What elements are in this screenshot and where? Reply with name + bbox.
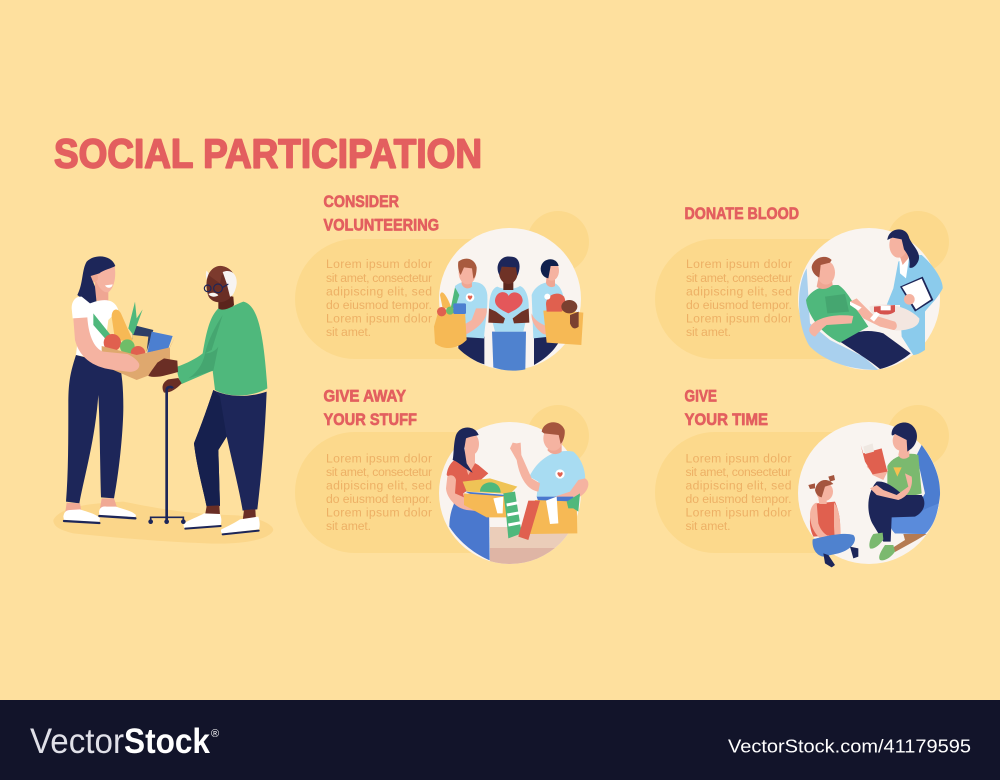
body text: Lorem ipsum dolor <box>686 506 792 520</box>
panel: donate blood <box>655 205 949 370</box>
body text: Lorem ipsum dolor <box>326 451 432 465</box>
body text: adipiscing elit, sed <box>686 478 792 492</box>
volunteer with heart <box>488 256 529 371</box>
heading <box>324 193 439 234</box>
body text <box>686 451 792 533</box>
clothes box <box>463 478 522 538</box>
body text: Lorem ipsum dolor <box>326 312 432 326</box>
man with box <box>510 422 588 540</box>
pill background <box>655 432 895 553</box>
panel: give your time <box>655 388 949 567</box>
heading: YOUR STUFF <box>324 411 417 429</box>
main illustration: woman handing grocery box to elderly man <box>53 256 273 544</box>
illustration: sharing clothes <box>446 422 588 560</box>
heading: CONSIDER <box>324 193 399 211</box>
armrest and blood bag <box>869 304 919 331</box>
donor <box>806 257 911 369</box>
illustration: blood donation <box>799 229 943 370</box>
elderly man <box>148 266 267 534</box>
child <box>808 475 858 567</box>
body text: sit amet, consectetur <box>686 465 792 479</box>
body text: Lorem ipsum dolor <box>686 312 792 326</box>
illustration circle <box>439 228 581 370</box>
title: SOCIAL PARTICIPATION <box>54 130 482 176</box>
footer logo: Vector <box>30 722 124 761</box>
grocery box <box>93 302 175 380</box>
panel: consider volunteering <box>295 193 589 371</box>
body text: do eiusmod tempor. <box>326 298 432 312</box>
illustration: three volunteers <box>434 256 583 371</box>
illustration circle <box>798 422 940 564</box>
footer logo <box>30 722 219 761</box>
body text <box>326 451 432 533</box>
body text: sit amet. <box>326 325 371 339</box>
body text: sit amet. <box>326 519 371 533</box>
heading: YOUR TIME <box>684 411 768 429</box>
pill background <box>655 239 895 359</box>
body text <box>686 257 792 339</box>
body text: sit amet, consectetur <box>686 271 792 285</box>
accent circle <box>887 211 949 273</box>
body text <box>326 257 432 339</box>
volunteer with box <box>532 259 583 365</box>
body text: Lorem ipsum dolor <box>686 257 792 271</box>
footer bar <box>0 700 1000 780</box>
body text: sit amet. <box>686 519 730 533</box>
body text: sit amet. <box>686 325 731 339</box>
body text: do eiusmod tempor. <box>686 492 792 506</box>
woman's arm <box>73 317 139 372</box>
illustration circle <box>439 422 581 564</box>
body text: Lorem ipsum dolor <box>686 451 792 465</box>
heading: DONATE BLOOD <box>684 205 799 223</box>
armchair <box>889 445 940 552</box>
walking cane <box>148 387 186 524</box>
footer logo: ® <box>211 728 219 740</box>
illustration: woman reading to child <box>808 423 940 567</box>
illustration circle <box>798 228 940 370</box>
accent circle <box>527 211 589 273</box>
body text: Lorem ipsum dolor <box>326 506 432 520</box>
heading <box>324 388 417 429</box>
illustration floor front <box>490 548 555 564</box>
accent circle <box>887 405 949 467</box>
body text: adipiscing elit, sed <box>326 478 432 492</box>
body text: do eiusmod tempor. <box>686 298 792 312</box>
body text: sit amet, consectetur <box>326 271 432 285</box>
footer image id: VectorStock.com/41179595 <box>728 736 971 756</box>
body text: Lorem ipsum dolor <box>326 257 432 271</box>
volunteer with bag <box>434 259 487 364</box>
pill background <box>295 239 535 359</box>
body text: adipiscing elit, sed <box>326 284 432 298</box>
footer logo: Stock <box>124 722 210 761</box>
body text: adipiscing elit, sed <box>686 284 792 298</box>
doctor <box>887 229 943 355</box>
ground shadow <box>53 502 273 544</box>
heading <box>684 388 768 429</box>
pill background <box>295 432 535 553</box>
woman <box>63 256 136 523</box>
accent circle <box>527 405 589 467</box>
body text: sit amet, consectetur <box>326 465 432 479</box>
reading woman <box>861 423 924 560</box>
body text: do eiusmod tempor. <box>326 492 432 506</box>
donor chair <box>799 268 878 370</box>
heading: GIVE <box>684 388 717 406</box>
panel: give away your stuff <box>295 388 590 570</box>
illustration floor <box>490 527 568 548</box>
heading: GIVE AWAY <box>324 388 406 406</box>
heading: VOLUNTEERING <box>324 216 439 234</box>
woman with box <box>446 427 492 560</box>
